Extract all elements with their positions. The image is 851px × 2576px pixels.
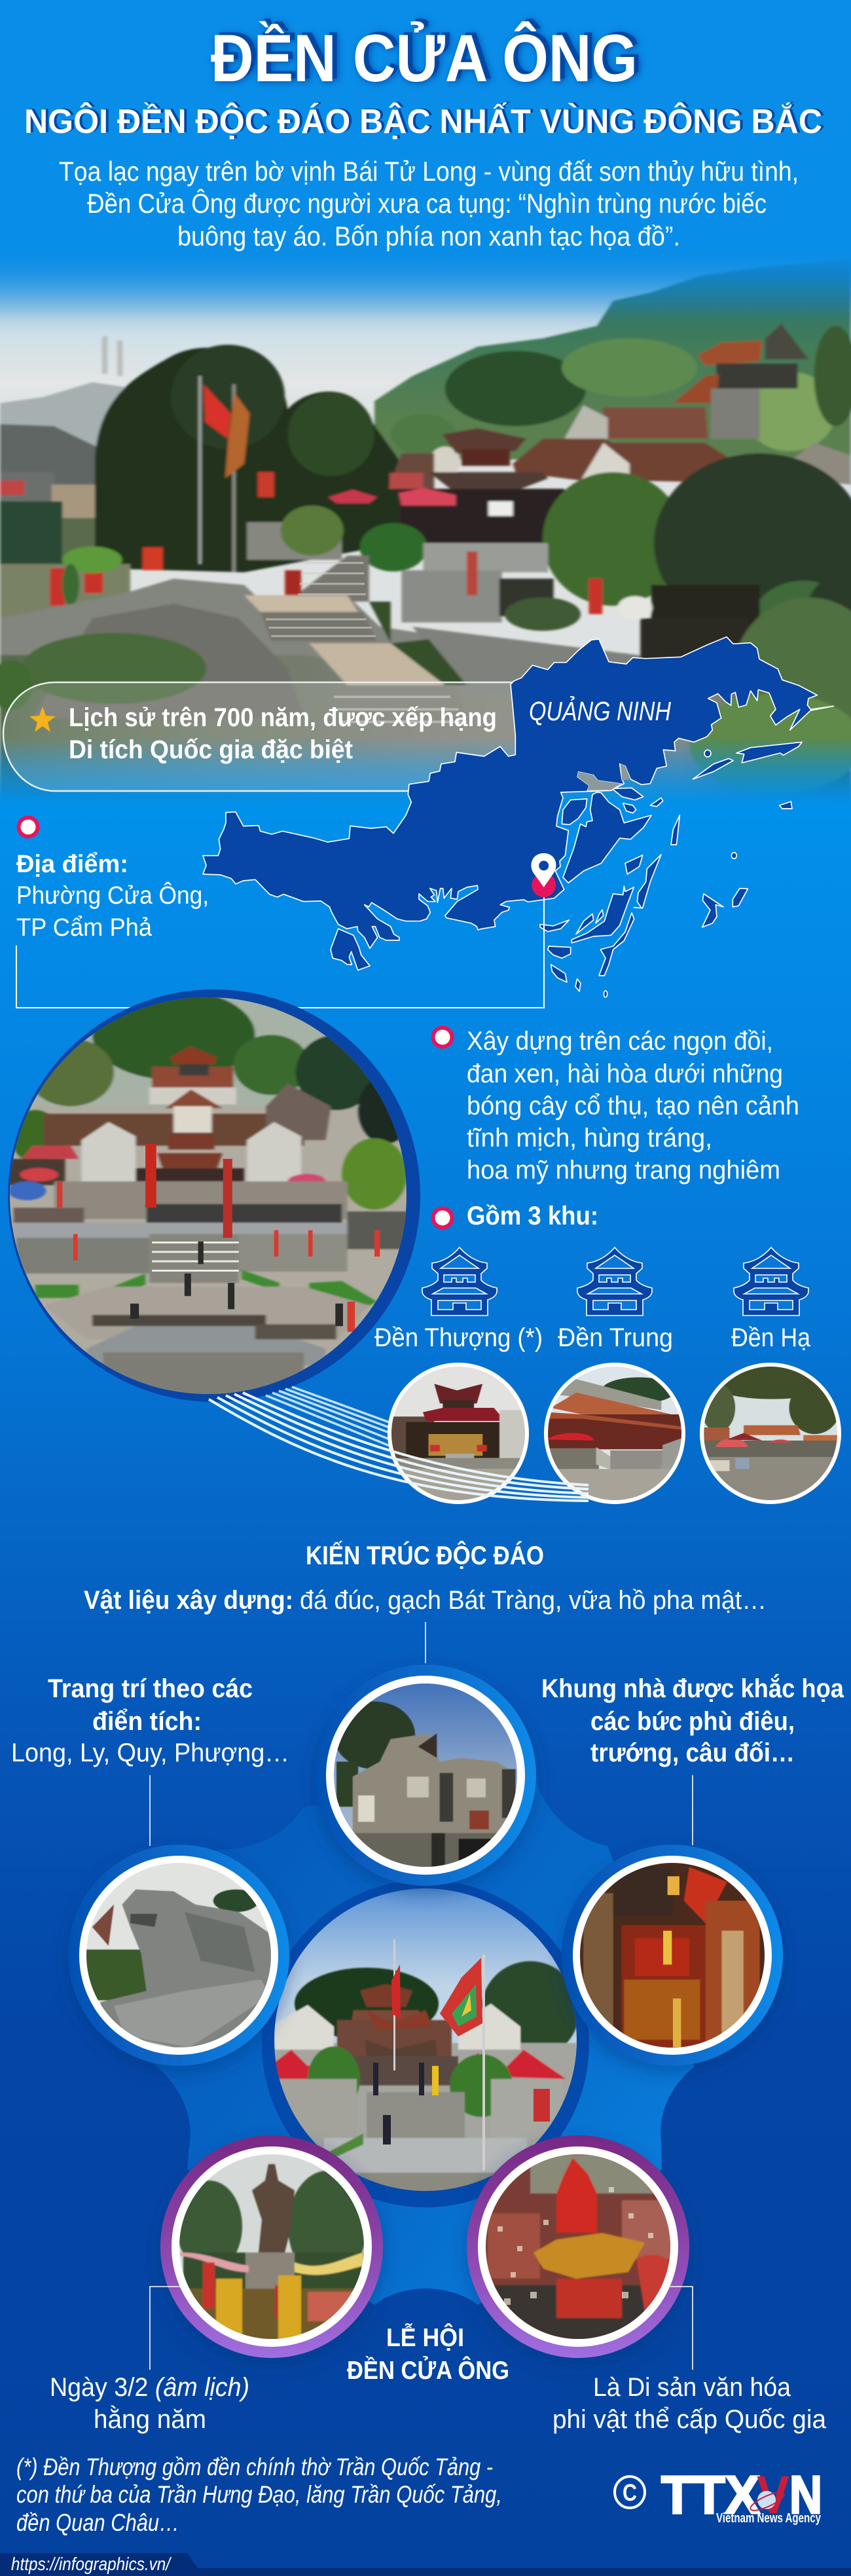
text: description: Xây dựng trên các ngọn đồi,	[467, 1027, 773, 1056]
text: festival heritage: Là Di sản văn hóa	[593, 2373, 791, 2402]
intro text: buông tay áo. Bốn phía non xanh tạc họa đồ”.	[177, 221, 680, 251]
logo: TTXVN	[661, 2465, 822, 2526]
map of Quang Ninh	[203, 637, 833, 997]
text: frame carvings: trướng, câu đối…	[590, 1739, 795, 1767]
icon: bullet	[18, 817, 38, 837]
text: festival heritage	[552, 2373, 827, 2434]
text: description: bóng cây cổ thụ, tạo nên cảnh	[467, 1092, 799, 1120]
icon: temple 1	[422, 1247, 497, 1316]
icon: temple 3	[734, 1247, 808, 1316]
labels of the three areas: Đền Thượng (*)	[374, 1323, 543, 1352]
text: decoration themes: điển tích:	[92, 1707, 202, 1736]
heading: festival: LỄ HỘI	[386, 2323, 464, 2352]
location text	[16, 817, 209, 942]
text: frame carvings	[541, 1673, 844, 1767]
footer url: https://infographics.vn/	[11, 2554, 172, 2574]
callout pill: history: Di tích Quốc gia đặc biệt	[69, 735, 353, 764]
footnote	[16, 2454, 502, 2536]
text: decoration themes	[11, 1674, 289, 1767]
location text: TP Cẩm Phả	[16, 914, 153, 942]
logo: TTXVN: N	[789, 2465, 822, 2525]
icon: location pin	[532, 853, 556, 897]
circle: top, stone gate	[315, 1665, 536, 1886]
connecting light-blue backdrop	[154, 1784, 695, 2305]
connector lines	[150, 1622, 693, 1846]
text: frame carvings: các bức phù điêu,	[590, 1707, 795, 1736]
connector: festival date	[150, 2287, 180, 2370]
copyright mark	[615, 2476, 645, 2508]
labels of the three areas: Đền Trung	[558, 1323, 673, 1352]
logo: TTXVN: TTX	[661, 2465, 760, 2525]
intro text: Đền Cửa Ông được người xưa ca tụng: “Nghìn trùng nước biếc	[87, 188, 767, 219]
small circle: Den Ha	[700, 1363, 841, 1504]
logo: TTXVN: Vietnam News Agency	[716, 2511, 822, 2526]
heading: festival	[347, 2323, 509, 2385]
small circle: Den Thuong	[388, 1363, 529, 1504]
text: decoration themes: Long, Ly, Quy, Phượng…	[11, 1739, 289, 1767]
text: building materials	[84, 1586, 767, 1615]
circle: bottom-left, statue and festival	[160, 2135, 383, 2358]
connector: festival heritage	[670, 2287, 693, 2370]
connector line from location pin to text	[16, 887, 544, 1008]
text: building materials: đá đúc, gạch Bát Tràng, vữa hồ pha mật…	[300, 1586, 767, 1615]
location text: Phường Cửa Ông,	[16, 881, 209, 910]
connecting stripes, upper bundle	[266, 1387, 393, 1447]
text: description: đan xen, hài hòa dưới những	[467, 1059, 783, 1088]
footer band	[0, 2553, 851, 2576]
text: decoration themes: Trang trí theo các	[48, 1674, 253, 1703]
subtitle: NGÔI ĐỀN ĐỘC ĐÁO BẬC NHẤT VÙNG ĐÔNG BẮC	[24, 102, 822, 141]
callout pill: history: Lịch sử trên 700 năm, được xếp hạng	[69, 703, 497, 732]
circle: bottom-right, festival crowd	[467, 2135, 689, 2358]
fade from photo into blue	[0, 737, 851, 803]
map label: QUẢNG NINH	[529, 695, 671, 726]
footnote: (*) Đền Thượng gồm đền chính thờ Trần Quốc Tảng -	[16, 2454, 493, 2480]
big circle ring	[8, 989, 420, 1402]
footnote: đền Quan Châu…	[16, 2509, 179, 2536]
text: festival date: hằng năm	[94, 2404, 206, 2434]
callout pill: history	[3, 682, 524, 791]
labels of the three areas: Đền Hạ	[731, 1323, 811, 1352]
title: ĐỀN CỬA ÔNG	[211, 21, 638, 96]
footnote: con thứ ba của Trần Hưng Đạo, lăng Trần Quốc Tảng,	[16, 2481, 502, 2508]
text: description: tĩnh mịch, hùng tráng,	[467, 1124, 712, 1152]
labels of the three areas	[374, 1323, 811, 1352]
center photo: temple with flags	[274, 1888, 579, 2196]
hero photo: temple on the hillside	[0, 246, 851, 832]
circle: right, carved interior	[562, 1845, 783, 2066]
logo: TTXVN: V	[757, 2465, 789, 2525]
icon: bullet	[433, 1209, 452, 1227]
big circle photo: temple courtyard	[10, 997, 407, 1394]
circle: left, stone dragon	[68, 1845, 289, 2066]
center circle ring	[262, 1880, 589, 2207]
heading: architecture: KIẾN TRÚC ĐỘC ĐÁO	[306, 1540, 544, 1570]
small circle: Den Trung	[544, 1363, 685, 1504]
intro text	[59, 156, 799, 251]
text: description	[433, 1027, 799, 1185]
text: festival heritage: phi vật thể cấp Quốc gia	[552, 2405, 827, 2434]
icon: bullet	[433, 1028, 452, 1046]
icon: star	[29, 707, 56, 732]
location text: Địa điểm:	[16, 851, 128, 878]
fade of the hero top into blue	[0, 248, 851, 320]
heading: three areas: Gồm 3 khu:	[467, 1202, 598, 1230]
heading: festival: ĐỀN CỬA ÔNG	[347, 2355, 509, 2385]
text: building materials: Vật liệu xây dựng:	[84, 1586, 293, 1615]
text: description: hoa mỹ nhưng trang nghiêm	[467, 1156, 780, 1185]
copyright mark: C	[623, 2479, 637, 2506]
connecting stripes, lower bundle	[209, 1393, 588, 1501]
text: festival date: Ngày 3/2 (âm lịch)	[50, 2373, 249, 2402]
icon: temple 2	[577, 1247, 652, 1316]
text: festival date	[50, 2373, 249, 2434]
